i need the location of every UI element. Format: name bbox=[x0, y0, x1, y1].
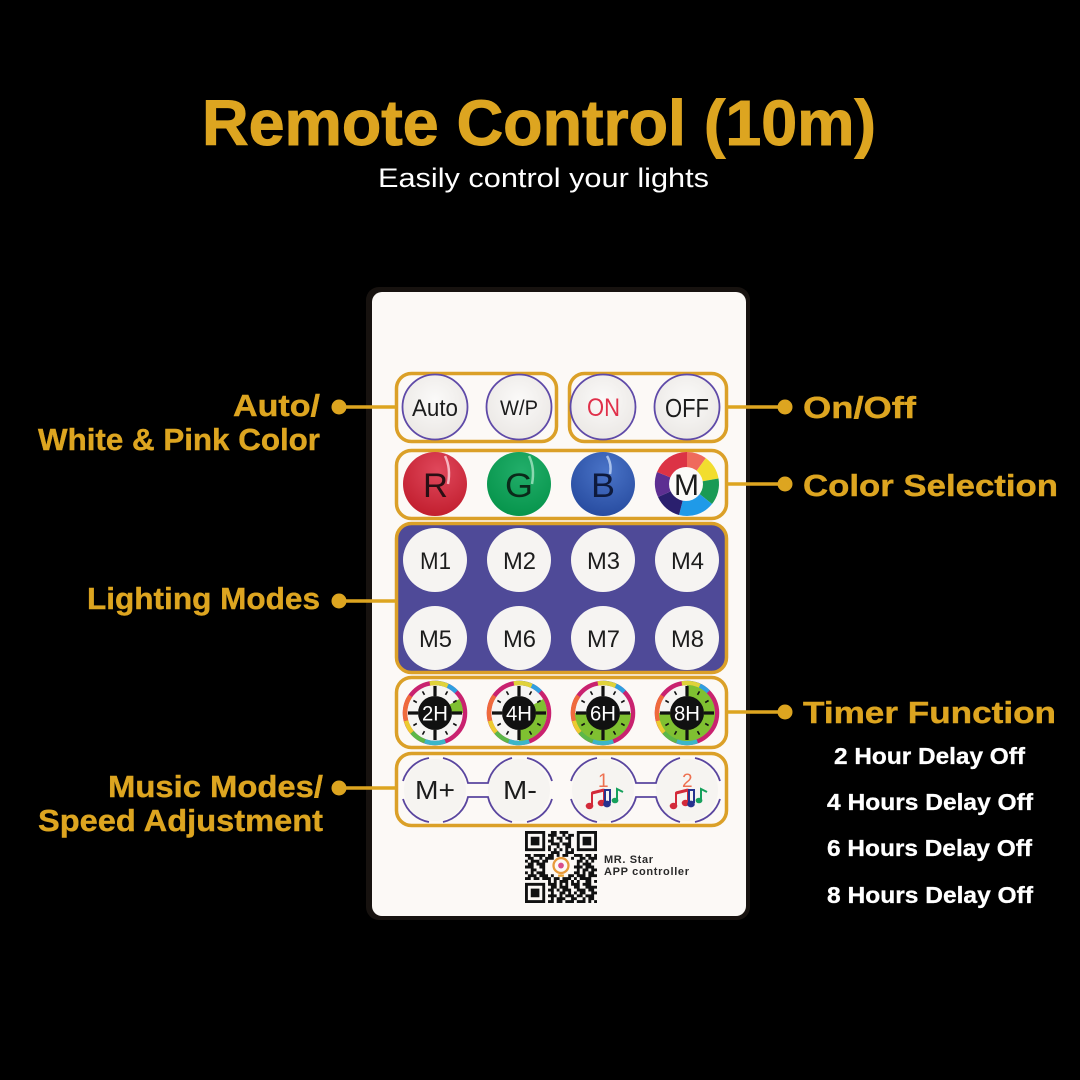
panel: music and speed buttons bbox=[396, 754, 726, 826]
button: music 2 bbox=[670, 771, 707, 809]
button: W/P: W/P bbox=[500, 397, 538, 420]
button: 6H bbox=[573, 683, 633, 743]
timer delay list: 6 Hours Delay Off bbox=[827, 835, 1032, 861]
button: 8H bbox=[657, 683, 717, 743]
button: M7 bbox=[571, 606, 635, 670]
button: multicolor M bbox=[655, 452, 719, 516]
panel: auto and white/pink buttons bbox=[396, 374, 556, 442]
QR code bbox=[525, 832, 597, 902]
button: M3 bbox=[571, 528, 635, 592]
remote control bbox=[366, 287, 750, 920]
title: Remote Control (10m) bbox=[202, 87, 876, 159]
button: R: R bbox=[423, 467, 448, 505]
button: Auto bbox=[402, 374, 468, 440]
panel: lighting modes buttons bbox=[396, 524, 726, 672]
QR caption: MR. Star bbox=[604, 854, 654, 866]
callout: on/off bbox=[727, 390, 917, 425]
button: M6: M6 bbox=[503, 626, 536, 653]
panel: timer buttons bbox=[396, 678, 726, 748]
callout: music modes / speed adjustment: Music Modes/ bbox=[108, 769, 323, 804]
button: M4: M4 bbox=[671, 548, 704, 575]
button: M1: M1 bbox=[420, 548, 451, 575]
button: multicolor M: M bbox=[674, 469, 699, 502]
panel: color selection buttons bbox=[396, 450, 726, 518]
button: M1 bbox=[403, 528, 467, 592]
button: 8H: 8H bbox=[674, 702, 700, 726]
button: ON bbox=[570, 374, 636, 440]
callout: color selection: Color Selection bbox=[803, 468, 1058, 503]
button: Auto: Auto bbox=[412, 395, 458, 422]
button: M5: M5 bbox=[419, 626, 452, 653]
button: M4 bbox=[655, 528, 719, 592]
subtitle: Easily control your lights bbox=[378, 163, 709, 193]
button: B: B bbox=[591, 467, 615, 505]
callout: color selection bbox=[727, 468, 1058, 503]
button: M8 bbox=[655, 606, 719, 670]
button: OFF bbox=[654, 374, 720, 440]
button: 6H: 6H bbox=[590, 702, 616, 726]
button: W/P bbox=[486, 374, 552, 440]
timer delay list bbox=[827, 743, 1033, 908]
button: G: G bbox=[505, 467, 533, 505]
callout: music modes / speed adjustment bbox=[38, 769, 396, 838]
button: M5 bbox=[403, 606, 467, 670]
callout: auto / white and pink color: Auto/ bbox=[233, 388, 320, 423]
callout: timer function: Timer Function bbox=[803, 695, 1056, 730]
QR caption bbox=[604, 854, 690, 878]
callout: on/off: On/Off bbox=[803, 390, 917, 425]
panel: on and off buttons bbox=[570, 374, 726, 442]
button: music 2: 2 bbox=[682, 771, 693, 792]
button: M2: M2 bbox=[503, 548, 536, 575]
button: B bbox=[571, 452, 635, 516]
button: M3: M3 bbox=[587, 548, 620, 575]
button: M8: M8 bbox=[671, 626, 704, 653]
button: G bbox=[487, 452, 551, 516]
button: music 1 bbox=[586, 771, 623, 809]
callout: timer function bbox=[727, 695, 1056, 730]
button: ON: ON bbox=[587, 394, 620, 422]
timer delay list: 2 Hour Delay Off bbox=[834, 743, 1025, 769]
button: M-: M- bbox=[503, 775, 537, 805]
button: music 1: 1 bbox=[598, 771, 609, 792]
QR caption: APP controller bbox=[604, 866, 690, 878]
callout: lighting modes: Lighting Modes bbox=[87, 581, 320, 616]
button: OFF: OFF bbox=[665, 393, 709, 423]
callout: auto / white and pink color bbox=[38, 388, 396, 457]
callout: music modes / speed adjustment: Speed Adjustment bbox=[38, 803, 323, 838]
button: 2H: 2H bbox=[422, 702, 448, 726]
button: M+: M+ bbox=[415, 775, 455, 805]
timer delay list: 8 Hours Delay Off bbox=[827, 882, 1033, 908]
button: 4H: 4H bbox=[506, 702, 532, 726]
button: M2 bbox=[487, 528, 551, 592]
button: R bbox=[403, 452, 467, 516]
button: M7: M7 bbox=[587, 626, 620, 653]
callout: auto / white and pink color: White & Pink Color bbox=[38, 422, 320, 457]
timer delay list: 4 Hours Delay Off bbox=[827, 789, 1033, 815]
button: 4H bbox=[489, 683, 549, 743]
button: M6 bbox=[487, 606, 551, 670]
button: 2H bbox=[405, 683, 465, 743]
remote body bbox=[366, 287, 750, 920]
